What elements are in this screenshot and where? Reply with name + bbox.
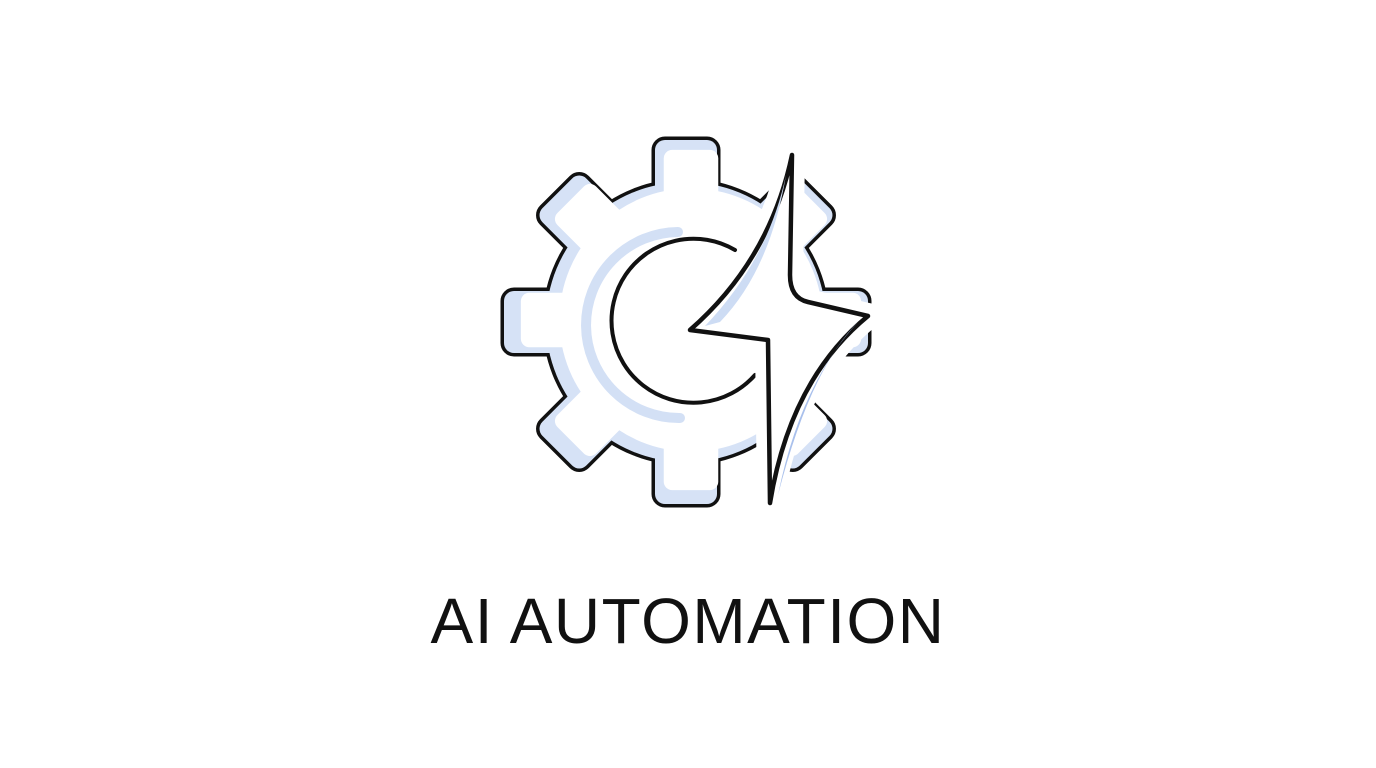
gear outline strokes	[504, 140, 868, 504]
inner C arc	[586, 232, 755, 418]
spark	[690, 155, 868, 503]
title: AI AUTOMATION	[431, 585, 945, 657]
